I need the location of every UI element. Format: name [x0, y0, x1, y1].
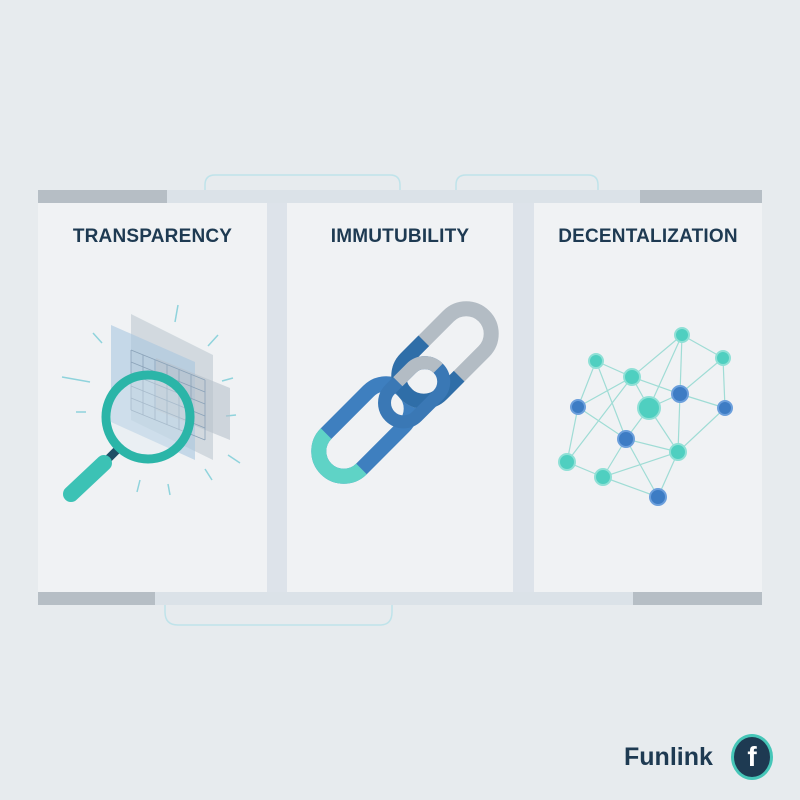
logo icon	[731, 734, 773, 780]
frame: column gaps	[38, 203, 762, 592]
frame: bottom bar	[38, 592, 762, 605]
panel: immutability	[287, 203, 513, 592]
panel: transparency	[38, 203, 267, 592]
logo text: Funlink	[624, 743, 713, 771]
heading: TRANSPARENCY	[73, 226, 232, 247]
logo: Funlink	[624, 734, 773, 780]
panel: decentralization	[534, 203, 762, 592]
logo icon: f	[747, 741, 757, 772]
heading: IMMUTUBILITY	[331, 226, 469, 247]
frame: top bar	[38, 190, 762, 203]
heading: DECENTALIZATION	[558, 226, 738, 247]
